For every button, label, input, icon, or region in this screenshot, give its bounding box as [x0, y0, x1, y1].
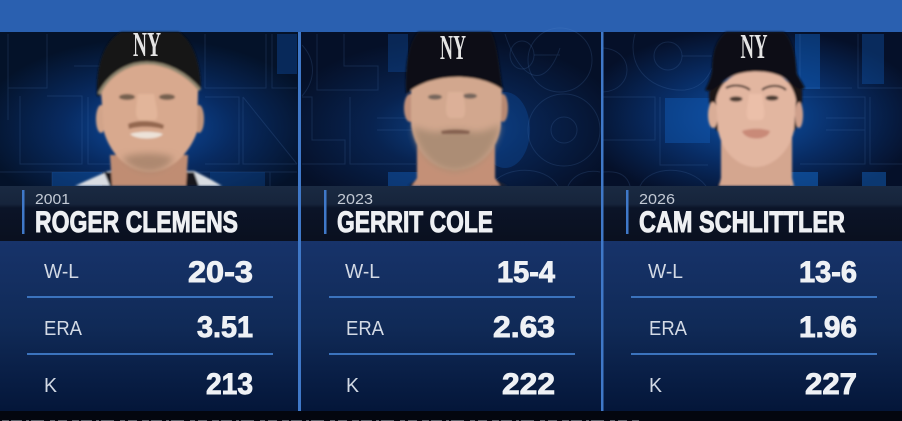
stats: Roger Clemens: 213	[206, 368, 253, 401]
name band: Roger Clemens	[0, 186, 298, 241]
stats: Cam Schlittler: K	[649, 375, 663, 397]
stats: Roger Clemens: W-L	[44, 261, 79, 283]
name band: Cam Schlittler	[603, 186, 902, 241]
stats: Cam Schlittler: W-L	[648, 261, 683, 283]
portrait: Gerrit Cole: NY	[440, 28, 466, 67]
stats: Gerrit Cole: 2.63	[493, 311, 555, 344]
name: ROGER CLEMENS	[35, 206, 238, 239]
stats: Gerrit Cole: W-L	[345, 261, 380, 283]
stats: Cam Schlittler: 13-6	[799, 256, 857, 289]
stats: Roger Clemens	[0, 241, 298, 411]
stats: Gerrit Cole: ERA	[346, 318, 385, 340]
name: GERRIT COLE	[337, 206, 493, 239]
top blue band	[0, 0, 902, 32]
stats: Gerrit Cole: 222	[502, 368, 555, 401]
stats: Roger Clemens: K	[44, 375, 58, 397]
name: CAM SCHLITTLER	[639, 206, 845, 239]
panel: Roger Clemens 2001	[0, 25, 298, 411]
stats: Roger Clemens: 20-3	[188, 256, 253, 289]
year: 2026	[639, 191, 675, 208]
stats: Gerrit Cole: 15-4	[497, 256, 555, 289]
portrait: Cam Schlittler	[705, 27, 805, 186]
portrait: Cam Schlittler: NY	[740, 27, 768, 66]
panel: Cam Schlittler 2026	[603, 27, 902, 411]
portrait: Roger Clemens: NY	[133, 25, 161, 64]
background: Schlittler wireframe lettering	[603, 32, 902, 186]
year: 2001	[35, 191, 70, 208]
background: Clemens wireframe lettering	[0, 32, 298, 186]
stats: Roger Clemens: ERA	[44, 318, 83, 340]
stats: Roger Clemens: 3.51	[197, 311, 253, 344]
name band: Gerrit Cole	[301, 186, 601, 241]
panel: Gerrit Cole 2023	[301, 28, 601, 411]
stats: Cam Schlittler	[603, 241, 902, 411]
portrait: Roger Clemens	[75, 25, 222, 186]
stats: Cam Schlittler: 227	[805, 368, 857, 401]
year: 2023	[337, 191, 373, 208]
bottom black strip	[0, 411, 902, 421]
stats: Cam Schlittler: 1.96	[799, 311, 857, 344]
stats: Gerrit Cole: K	[346, 375, 360, 397]
portrait: Gerrit Cole	[404, 28, 508, 186]
background: Cole wireframe lettering	[301, 28, 601, 186]
stats: Cam Schlittler: ERA	[649, 318, 688, 340]
stats: Gerrit Cole	[301, 241, 601, 411]
